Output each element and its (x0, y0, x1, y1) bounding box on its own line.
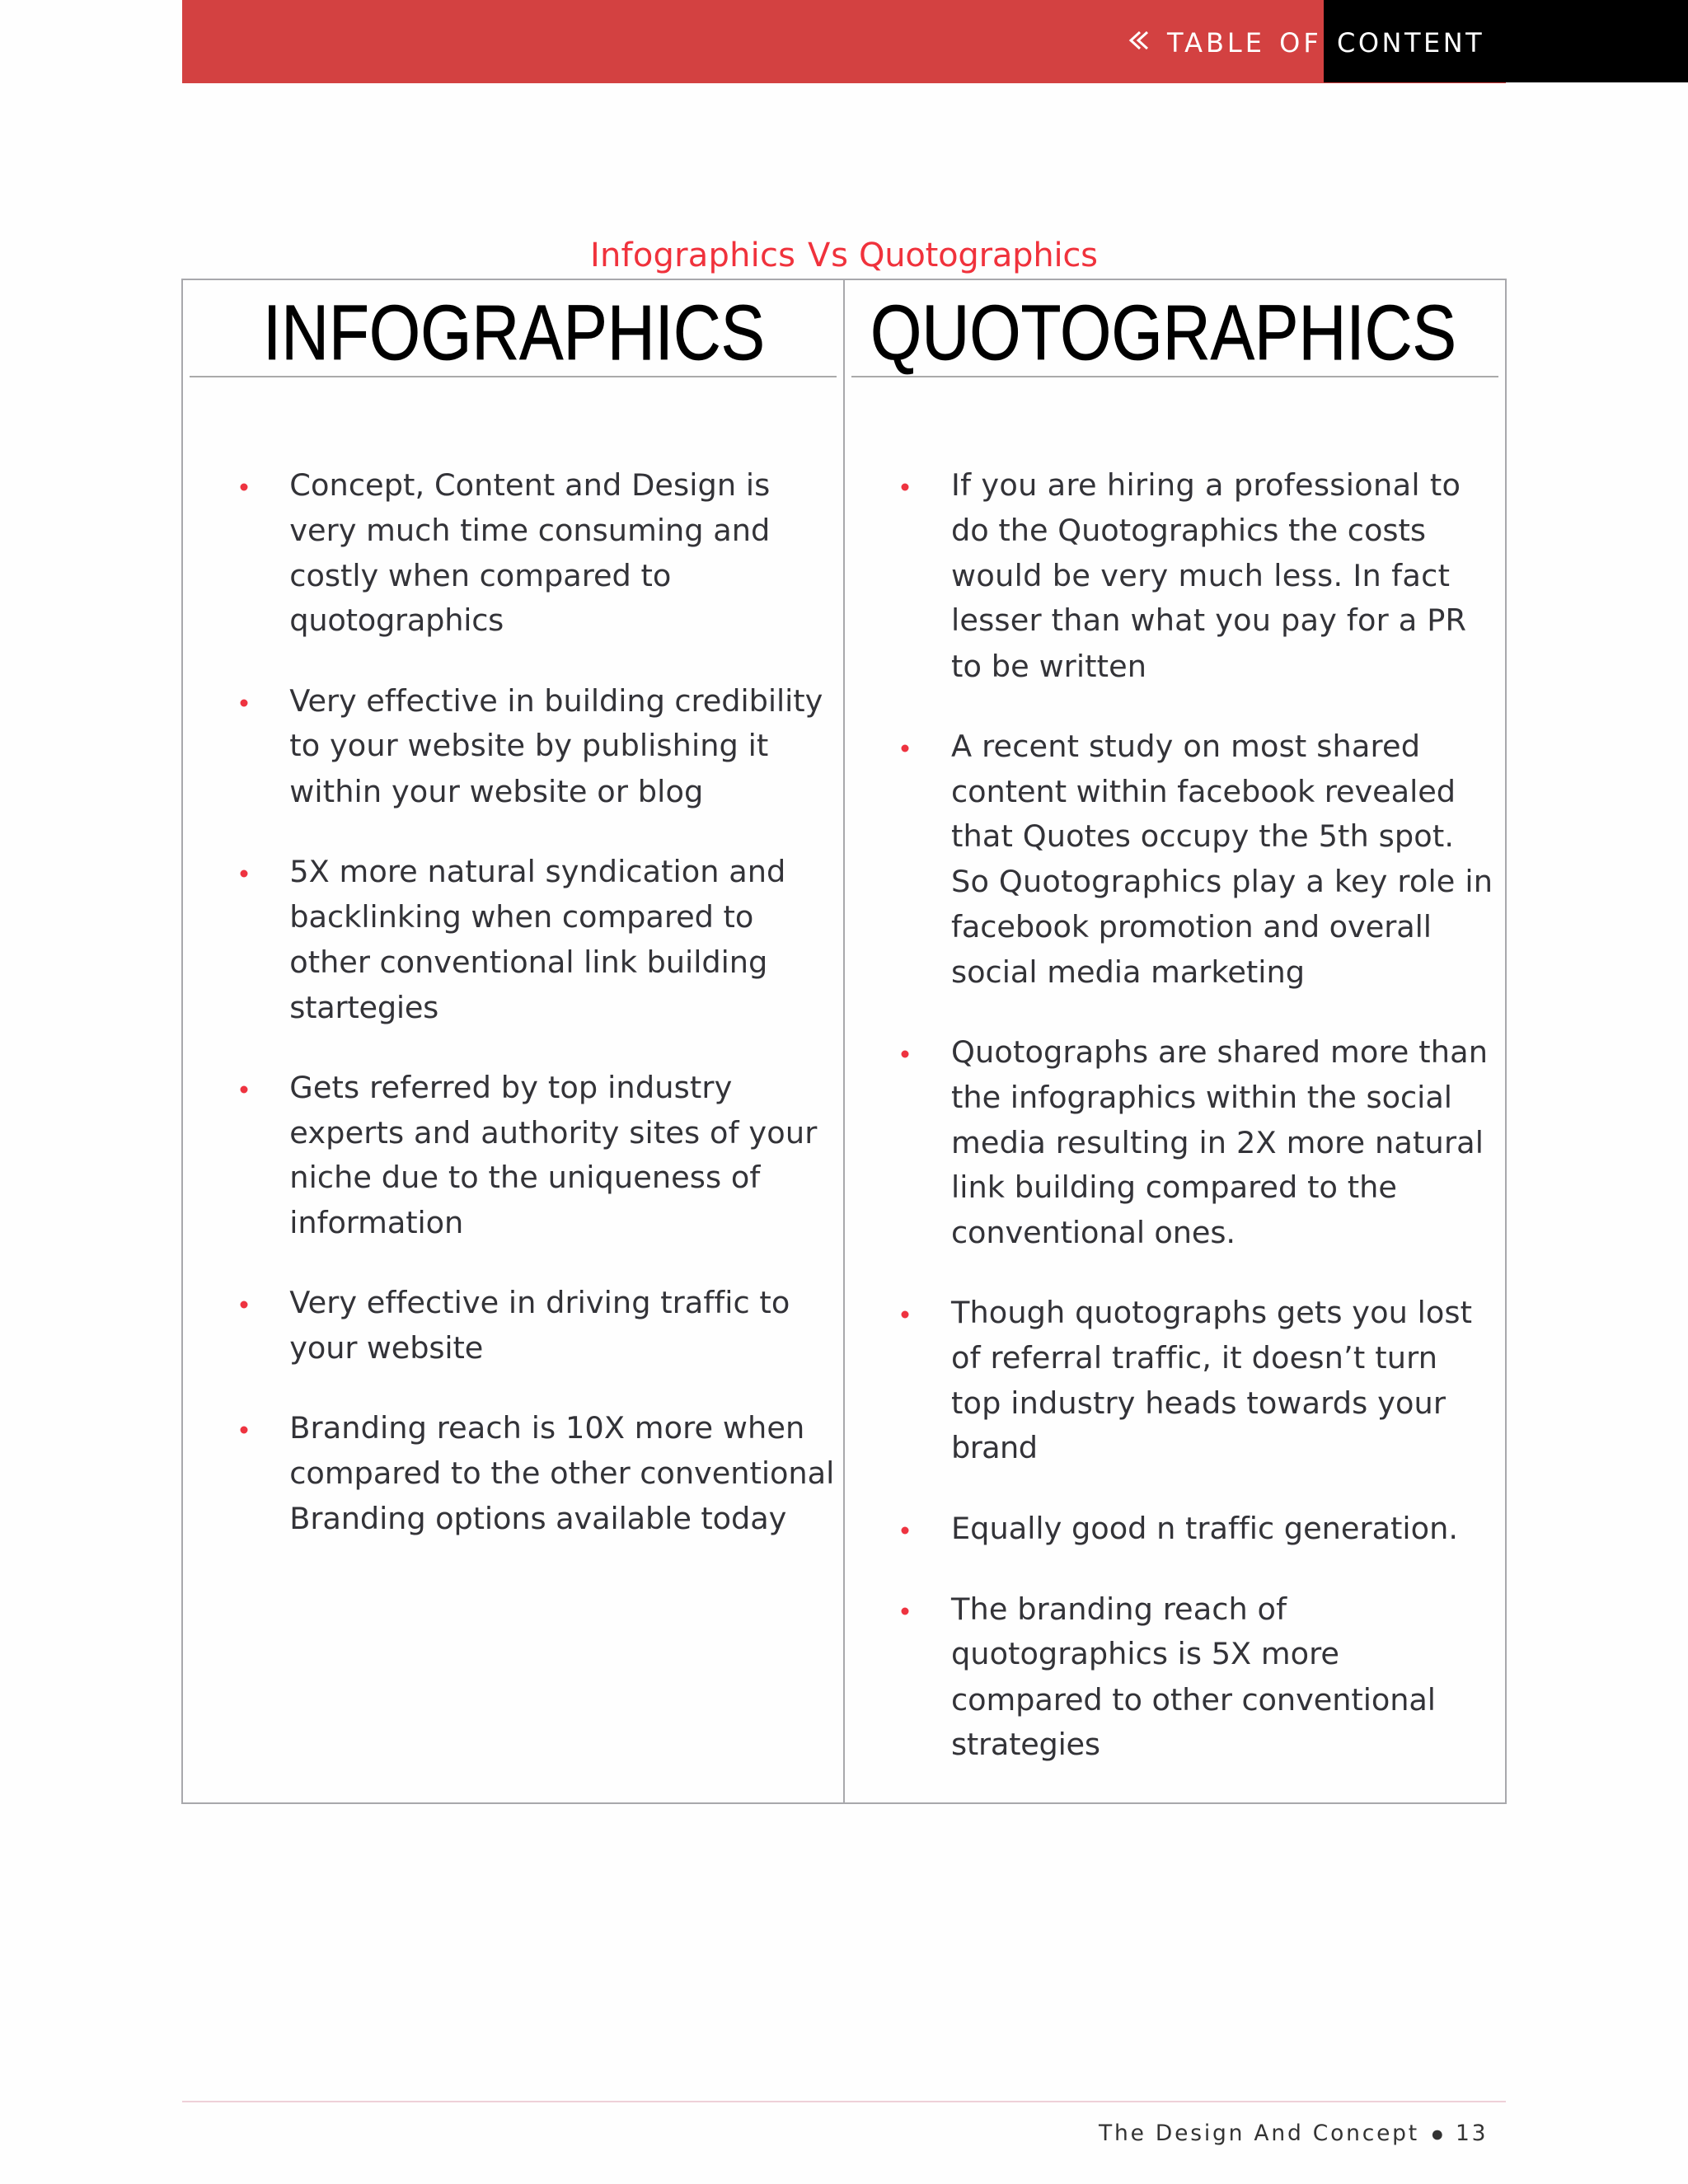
bullet 5: Equally good n traffic generation. (951, 1511, 1458, 1546)
bullet 2: within your website or blog (289, 774, 703, 809)
bullet 6: The branding reach of (950, 1591, 1287, 1627)
bullet 3: the infographics within the social (951, 1080, 1452, 1115)
bullet 4: top industry heads towards your (951, 1385, 1447, 1421)
bullet 1: quotographics (289, 602, 504, 638)
bullet 5 (241, 1285, 790, 1366)
bullet 3 (902, 1034, 1488, 1250)
footer: section name and page number: The Design And Concept (1098, 2121, 1419, 2146)
bullet 4: Though quotographs gets you lost (950, 1295, 1472, 1330)
bullet 2: So Quotographics play a key role in (951, 864, 1493, 899)
header label: table of content: TABLE OF (1166, 27, 1322, 59)
bullet 5: Very effective in driving traffic to (289, 1285, 790, 1320)
bullet 4: of referral traffic, it doesn’t turn (951, 1340, 1437, 1376)
bullet 1: would be very much less. In fact (951, 558, 1450, 593)
bullet 1: If you are hiring a professional to (951, 467, 1461, 503)
comparison table frame (182, 279, 1506, 1803)
header bar (182, 0, 1688, 83)
bullet 6 (902, 1591, 1436, 1762)
bullet 4: brand (951, 1430, 1038, 1465)
bullet 4 (902, 1295, 1472, 1465)
bullet 1: lesser than what you pay for a PR (951, 602, 1466, 638)
header label: table of content: CONTENT (1337, 27, 1484, 59)
bullet 2: to your website by publishing it (289, 728, 768, 763)
bullet 6: Branding options available today (289, 1501, 786, 1536)
bullet 4 (241, 1070, 818, 1240)
bullet 2 (902, 729, 1493, 990)
heading: infographics: INFOGRAPHICS (263, 289, 765, 377)
bullet 3: link building compared to the (951, 1169, 1397, 1205)
bullet 1: to be written (951, 649, 1146, 684)
bullet 1: costly when compared to (289, 558, 671, 593)
bullet 3: conventional ones. (951, 1215, 1236, 1250)
bullet 3: 5X more natural syndication and (289, 854, 785, 889)
bullet 1: Concept, Content and Design is (289, 467, 770, 503)
bullet 6: strategies (951, 1727, 1100, 1762)
bullet 1: do the Quotographics the costs (951, 513, 1426, 548)
bullet 2: Very effective in building credibility (289, 683, 823, 719)
heading: quotographics: QUOTOGRAPHICS (870, 289, 1456, 377)
bullet 2: social media marketing (951, 954, 1305, 990)
bullet 2: that Quotes occupy the 5th spot. (951, 818, 1454, 854)
bullet 2: content within facebook revealed (951, 774, 1456, 809)
bullet 1 (241, 467, 770, 638)
bullet 6 (241, 1410, 834, 1536)
bullet 6: Branding reach is 10X more when (289, 1410, 804, 1446)
title: Infographics (590, 237, 795, 274)
title: Vs (808, 237, 848, 274)
bullet 2: facebook promotion and overall (951, 909, 1432, 944)
bullet 1 (902, 467, 1466, 684)
footer: section name and page number: ● (1432, 2126, 1443, 2141)
bullet 4: Gets referred by top industry (289, 1070, 732, 1105)
icon: double chevron (1131, 32, 1147, 49)
bullet 4: experts and authority sites of your (289, 1115, 818, 1151)
bullet 3: startegies (289, 990, 438, 1025)
bullet 3: other conventional link building (289, 944, 767, 980)
bullet 6: quotographics is 5X more (951, 1636, 1339, 1671)
bullet 6: compared to the other conventional (289, 1455, 834, 1491)
bullet 3: media resulting in 2X more natural (951, 1125, 1484, 1160)
bullet 1: very much time consuming and (289, 513, 770, 548)
panel: infographics column (190, 289, 837, 1536)
bullet 3: Quotographs are shared more than (951, 1034, 1488, 1070)
bullet 4: information (289, 1205, 463, 1240)
bullet 2: A recent study on most shared (951, 729, 1420, 764)
panel: quotographics column (851, 289, 1498, 1762)
bullet 2 (241, 683, 823, 809)
bullet 3 (241, 854, 785, 1025)
title: Quotographics (859, 237, 1098, 274)
footer: section name and page number: 13 (1456, 2121, 1488, 2146)
bullet 5: your website (289, 1330, 483, 1366)
bullet 4: niche due to the uniqueness of (289, 1160, 761, 1195)
bullet 3: backlinking when compared to (289, 899, 753, 935)
bullet 6: compared to other conventional (951, 1682, 1436, 1718)
